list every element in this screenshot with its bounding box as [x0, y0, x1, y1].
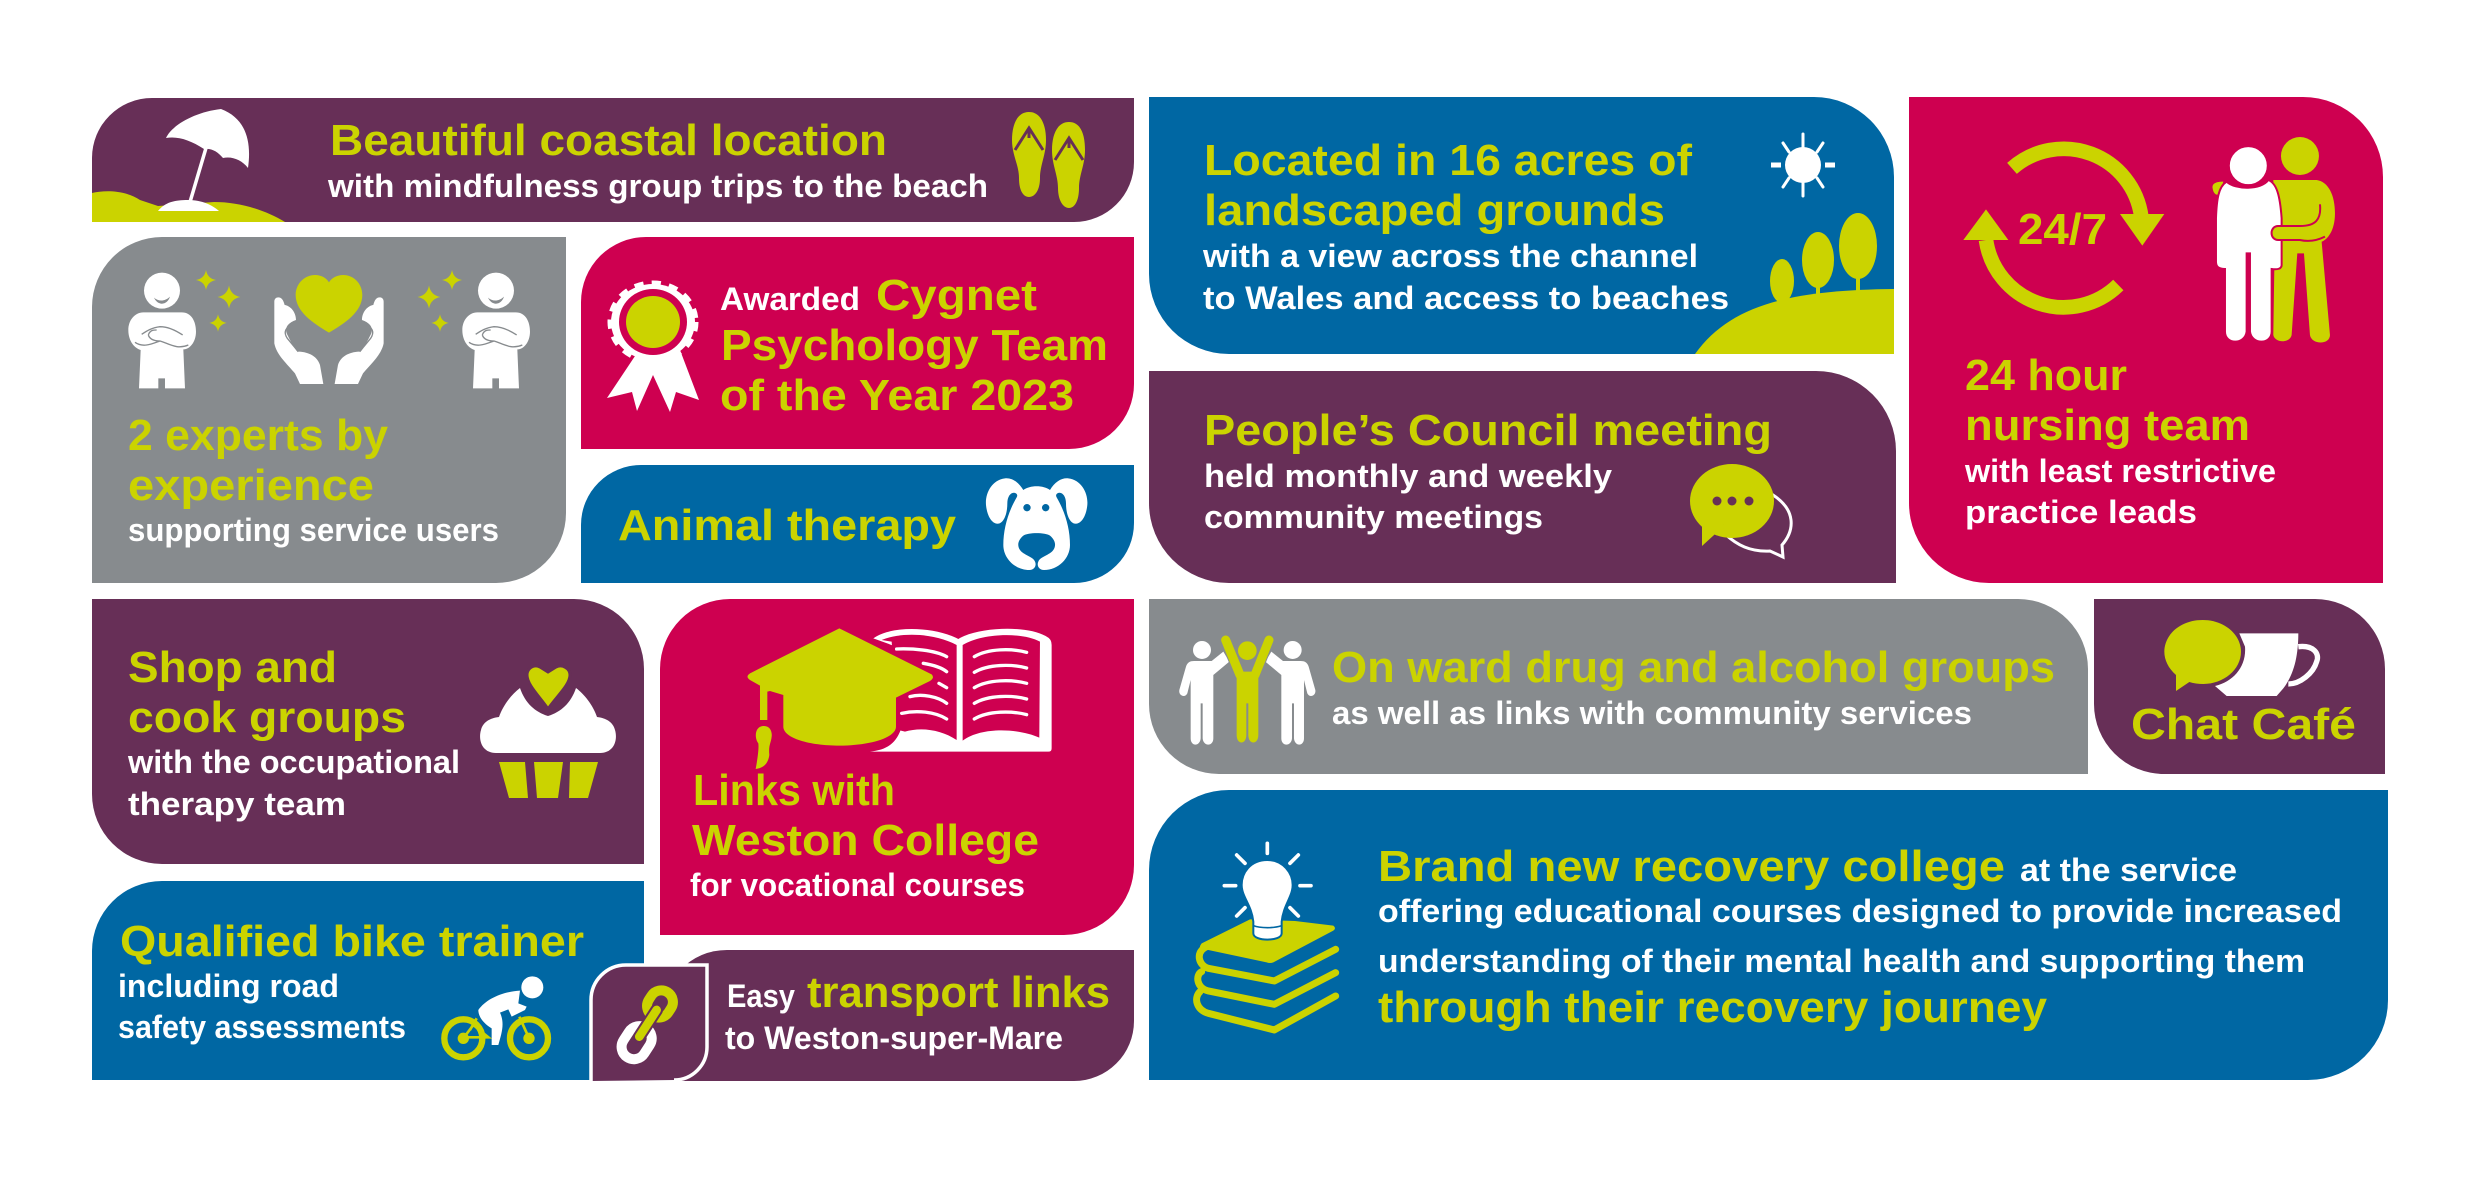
text: supporting service users: supporting service users: [128, 512, 499, 548]
heading: shop and cook groups: Shop and: [128, 643, 337, 692]
heading: beautiful coastal location: Beautiful coastal location: [330, 116, 887, 165]
heading: 24 hour nursing team: 24 hour: [1965, 351, 2127, 400]
heading: Cygnet Psychology Team of the Year 2023: Cygnet: [876, 271, 1037, 320]
heading: links with Weston College: Weston College: [692, 816, 1039, 865]
icon: hill with trees: [1695, 213, 1894, 354]
text: view across the channel: [1202, 238, 1729, 316]
panel: beautiful coastal location: [92, 98, 1134, 222]
heading: links with Weston College: Links with: [693, 766, 895, 815]
icon: cupcake with heart: [480, 666, 616, 798]
text: view across the channel: with a view across the channel: [1202, 238, 1698, 274]
panel: links with Weston College: [660, 599, 1134, 935]
text: monthly and weekly meetings: held monthly and weekly: [1204, 458, 1612, 494]
text: view across the channel: to Wales and access to beaches: [1203, 280, 1729, 316]
heading: people's council meeting: People’s Council meeting: [1204, 406, 1772, 455]
text: links with community services: as well as links with community services: [1332, 695, 1972, 731]
text: least restrictive practice leads: [1964, 453, 2276, 530]
heading: 2 experts by experience: experience: [128, 461, 374, 510]
heading: qualified bike trainer: Qualified bike trainer: [120, 917, 584, 966]
text: road safety assessments: safety assessments: [118, 1009, 406, 1045]
heading: 24 hour nursing team: nursing team: [1965, 401, 2250, 450]
text: road safety assessments: [118, 968, 406, 1045]
text: at the service offering courses: [1378, 852, 2342, 979]
heading: 2 experts by experience: [128, 411, 389, 510]
text: road safety assessments: including road: [118, 968, 339, 1004]
icon: speech bubbles: [1690, 464, 1791, 557]
heading: Cygnet Psychology Team of the Year 2023: [720, 271, 1108, 420]
panel: people's council meeting: [1149, 371, 1896, 583]
icon: open book: [870, 629, 1052, 752]
text: occupational therapy team: with the occupational: [127, 744, 460, 780]
icon: three people with raised arms: [1179, 640, 1315, 745]
icon: stack of books: [1197, 919, 1336, 1030]
icon: hands holding heart: [274, 275, 384, 384]
icon: left sparkles: [196, 270, 240, 332]
text: least restrictive practice leads: with least restrictive: [1964, 453, 2276, 489]
icon: two people embracing: [2213, 137, 2335, 342]
text: occupational therapy team: therapy team: [128, 786, 346, 822]
heading: located in 16 acres: landscaped grounds: [1204, 186, 1665, 235]
icon: award rosette: [607, 284, 699, 412]
panel: shop and cook groups: [92, 599, 644, 864]
text: occupational therapy team: [127, 744, 460, 822]
text: monthly and weekly meetings: community meetings: [1204, 499, 1543, 535]
icon: right person with crossed arms: [462, 273, 530, 388]
heading: chat cafe: Chat Café: [2131, 700, 2356, 749]
heading: brand new recovery college: Brand new recovery college: [1378, 842, 2005, 891]
icon: speech bubble and cup: [2164, 620, 2317, 696]
icon: dog: [986, 478, 1087, 570]
heading: Cygnet Psychology Team of the Year 2023: Psychology Team: [721, 321, 1108, 370]
panel: landscaped grounds: [1149, 97, 1894, 354]
text: awarded: Awarded: [720, 281, 860, 317]
text: at the service offering courses: at the service: [2020, 852, 2237, 888]
icon: 24/7 circular arrows: [1963, 149, 2164, 307]
text: at the service offering courses: offering educational courses designed to provide increased: [1378, 893, 2342, 929]
heading: 24 hour nursing team: [1965, 351, 2250, 450]
heading: shop and cook groups: cook groups: [128, 693, 406, 742]
text: monthly and weekly meetings: [1204, 458, 1612, 535]
heading: animal therapy: Animal therapy: [618, 501, 957, 550]
icon: sun: [1771, 134, 1835, 196]
text: for vocational courses: for vocational courses: [690, 867, 1025, 903]
text: at the service offering courses: understanding of their mental health and supporting them: [1378, 943, 2305, 979]
heading: Cygnet Psychology Team of the Year 2023: of the Year 2023: [720, 371, 1074, 420]
heading: links with Weston College: [692, 766, 1039, 865]
panel: animal therapy: [581, 465, 1134, 583]
heading: 2 experts by experience: 2 experts by: [128, 411, 389, 460]
panel: chat cafe: [2094, 599, 2385, 774]
icon: beach umbrella on sand: [92, 109, 285, 222]
heading: on ward drug and alcohol groups: On ward drug and alcohol groups: [1332, 643, 2055, 692]
text: to Weston-super-Mare: to Weston-super-Mare: [725, 1020, 1063, 1056]
panel: easy transport links: [591, 950, 1134, 1081]
heading: through their recovery journey: through their recovery journey: [1378, 983, 2048, 1032]
panel: brand new recovery college: [1149, 790, 2388, 1080]
icon: cyclist: [444, 976, 548, 1057]
text: least restrictive practice leads: practice leads: [1965, 494, 2197, 530]
panel: qualified bike trainer: [92, 881, 644, 1080]
heading: transport links: transport links: [807, 968, 1110, 1017]
heading: shop and cook groups: [128, 643, 406, 742]
icon: graduation cap: [747, 628, 933, 769]
panel: drug and alcohol groups: [1149, 599, 2088, 774]
panel: experts by experience: [92, 237, 566, 583]
text: easy: Easy: [727, 978, 795, 1014]
icon: light bulb: [1224, 843, 1311, 940]
icon: left person with crossed arms: [128, 273, 196, 388]
panel: 24 hour nursing team: [1909, 97, 2383, 583]
heading: located in 16 acres: [1204, 136, 1692, 235]
icon: right sparkles: [418, 270, 462, 332]
text: mindfulness trips: with mindfulness group trips to the beach: [327, 168, 988, 204]
panel: psychology team award: [581, 237, 1134, 449]
heading: located in 16 acres: Located in 16 acres of: [1204, 136, 1692, 185]
icon: flip-flops: [1012, 112, 1085, 208]
icon box: chain link: [591, 965, 707, 1081]
icon: 24/7 circular arrows: 24/7: [2018, 205, 2107, 254]
